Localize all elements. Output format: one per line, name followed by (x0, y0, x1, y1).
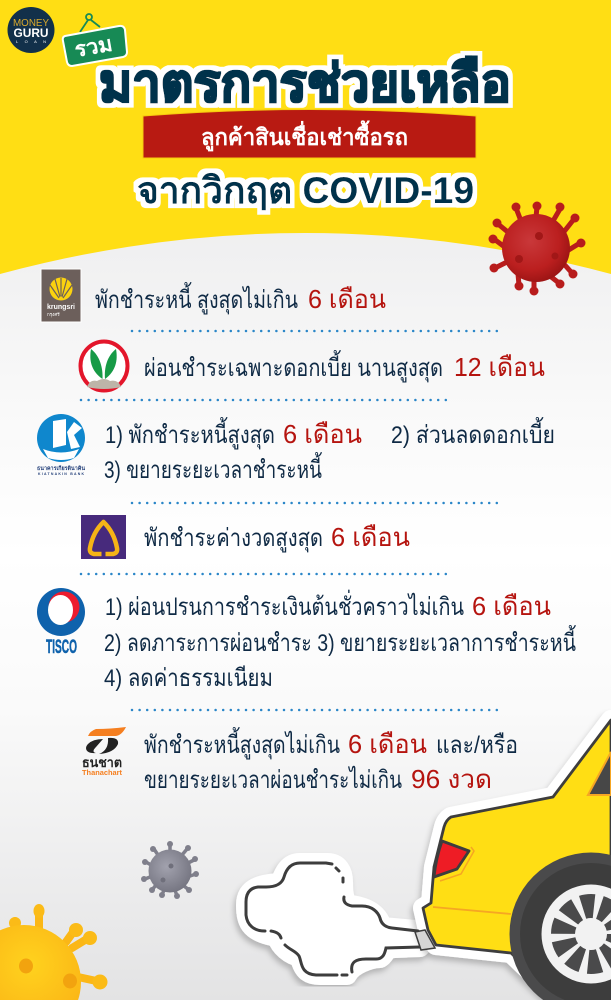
text: SCB measure: 6 เดือน (331, 522, 410, 552)
exhaust pipe (344, 897, 435, 972)
body crease (433, 907, 511, 914)
row: Kasikorn (80, 342, 545, 390)
text: Kiatnakin measures (104, 417, 555, 484)
text: Thanachart measures (144, 727, 518, 794)
text: Thanachart measures: พักชำระหนี้สูงสุดไม่เกิน (144, 727, 340, 760)
text: TISCO measures: 1) ผ่อนปรนการชำระเงินต้นชั่วคราวไม่เกิน (105, 589, 464, 621)
logo: Krungsri: กรุงศรี (47, 312, 60, 318)
icon: yellow virus (0, 904, 108, 1000)
logo: Krungsri: krungsri (47, 304, 75, 311)
row: TISCO (37, 588, 576, 692)
logo: SCB (81, 515, 126, 559)
text: TISCO measures (104, 589, 576, 692)
title: main heading: มาตรการช่วยเหลือ (99, 55, 511, 113)
text: Kasikorn measure: ผ่อนชำระเฉพาะดอกเบี้ย นานสูงสุด (144, 350, 443, 383)
car window (588, 752, 611, 795)
text: Kiatnakin measures: 6 เดือน (283, 419, 362, 449)
logo: Thanachart: ธนชาต (82, 755, 122, 770)
logo: Money Guru Loan: MONEY (13, 18, 49, 29)
logo: Krungsri (41, 269, 81, 322)
tail light (434, 841, 469, 877)
logo: Kiatnakin: KIATNAKIN BANK (38, 472, 84, 476)
text: Thanachart measures: ขยายระยะเวลาผ่อนชำระไม่เกิน (144, 766, 402, 794)
logo: Thanachart (82, 727, 126, 777)
text: Thanachart measures: และ/หรือ (436, 732, 518, 759)
text: SCB measure: พักชำระค่างวดสูงสุด (144, 525, 323, 553)
logo: Money Guru Loan: GURU (14, 26, 48, 40)
illustration: yellow car (423, 720, 611, 1000)
text: Kasikorn measure: 12 เดือน (454, 352, 545, 382)
hanging sign: รวม: รวม (73, 33, 114, 62)
logo: Thanachart: Thanachart (82, 768, 122, 777)
text: Kiatnakin measures: 1) พักชำระหนี้สูงสุด (105, 417, 275, 450)
illustration: exhaust smoke (246, 863, 420, 975)
yellow header background (0, 0, 611, 300)
icon: grey virus (141, 841, 199, 899)
logo: Kiatnakin (37, 414, 85, 476)
text: Thanachart measures: 6 เดือน (348, 729, 427, 759)
curved light content background (0, 233, 611, 1000)
text: Thanachart measures: 96 งวด (411, 764, 492, 794)
text: Kiatnakin measures: 3) ขยายระยะเวลาชำระหนี้ (104, 452, 322, 484)
logo: Kiatnakin: ธนาคารเกียรตินาคิน (37, 465, 85, 472)
logo: TISCO (37, 588, 85, 658)
row: Kiatnakin (37, 414, 555, 484)
text: Kiatnakin measures: 2) ส่วนลดดอกเบี้ย (391, 417, 555, 449)
red banner: ลูกค้าสินเชื่อเช่าซื้อรถ (201, 120, 408, 152)
logo: TISCO: TISCO (46, 637, 77, 658)
row: SCB (81, 515, 410, 559)
hanging sign: รวม (63, 14, 127, 66)
red banner (143, 110, 476, 158)
text: Krungsri measure: 6 เดือน (308, 284, 386, 314)
text: TISCO measures: 4) ลดค่าธรรมเนียม (104, 665, 273, 692)
row: Krungsri (41, 269, 386, 322)
wheel (510, 852, 611, 1000)
logo: Money Guru Loan (8, 7, 54, 53)
icon: red virus (488, 202, 586, 296)
text: Krungsri measure: พักชำระหนี้ สูงสุดไม่เกิน (95, 282, 298, 315)
logo: Kasikorn (80, 342, 128, 390)
logo: Money Guru Loan: LOAN (16, 39, 46, 44)
subtitle: COVID-19: จากวิกฤต COVID-19 (137, 170, 474, 211)
text: TISCO measures: 6 เดือน (472, 591, 551, 621)
row: Thanachart (82, 727, 518, 794)
